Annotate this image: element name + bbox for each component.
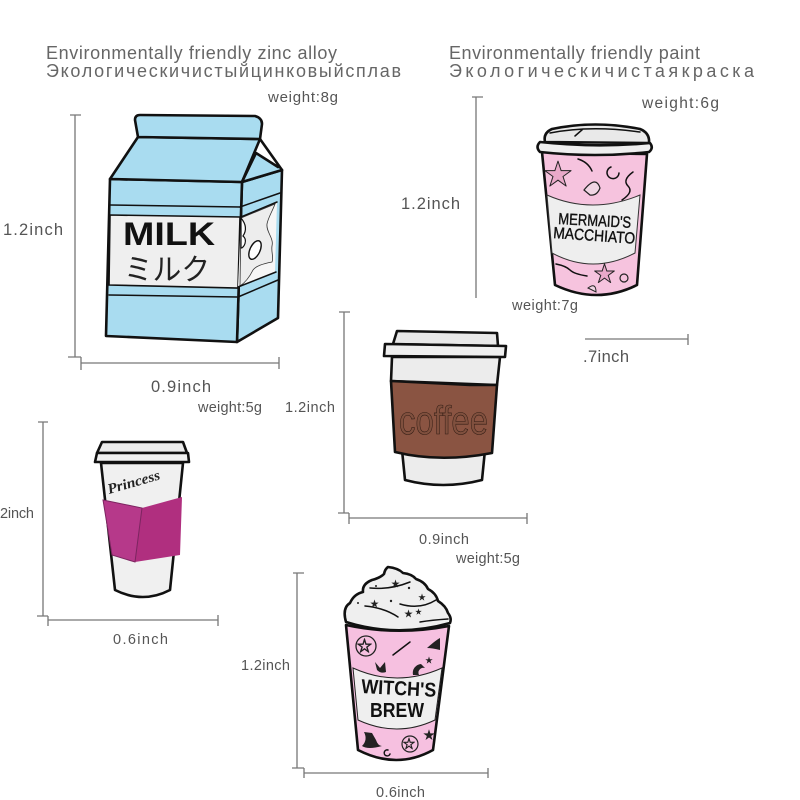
cup body — [346, 625, 449, 760]
witch icons — [356, 636, 440, 756]
dimension: mermaid cup: .7inch — [583, 348, 629, 366]
witch icons: ☆ — [403, 737, 415, 751]
pin: witch's brew cup: BREW — [370, 700, 424, 722]
carton roof fold — [242, 139, 282, 182]
dimension: milk carton: 1.2inch — [3, 221, 63, 239]
pin: mermaid's macchiato cup — [538, 124, 652, 295]
dimension: witch cup: 1.2inch — [241, 658, 290, 674]
magenta sleeve — [103, 497, 182, 562]
dimension: princess cup — [0, 422, 218, 648]
white front panel — [109, 215, 240, 288]
weight labels: weight:5g — [197, 400, 262, 416]
pin: milk carton — [106, 115, 282, 342]
dimension: coffee cup — [285, 312, 527, 548]
carton top tab — [135, 115, 262, 139]
katakana text: ミルク — [124, 254, 210, 287]
MILK text: MILK — [123, 216, 215, 252]
dimension: mermaid cup: 1.2inch — [401, 195, 460, 213]
pin: mermaid's macchiato cup: MACCHIATO — [553, 225, 636, 248]
white band — [353, 668, 442, 729]
cream stars: ★ — [370, 599, 379, 609]
witch icons: ★ — [423, 728, 435, 742]
cream stars — [357, 579, 426, 619]
lid — [97, 442, 187, 453]
heading: paint: Environmentally friendly paint — [449, 43, 700, 63]
carton front — [106, 179, 242, 342]
cup body — [391, 357, 500, 385]
heading: zinc alloy: Экологическичистыйцинковыйсплав — [46, 61, 401, 81]
cream stars: ★ — [418, 593, 426, 602]
whipped cream — [345, 567, 451, 630]
lid — [393, 331, 498, 346]
dimension: coffee cup: 1.2inch — [285, 400, 335, 416]
dimension: milk carton — [3, 115, 279, 396]
dimension: mermaid cup — [401, 97, 688, 366]
cup body — [542, 152, 647, 295]
witch's brew text: WITCH'S — [361, 676, 437, 702]
carton roof — [110, 137, 260, 182]
weight labels: weight:7g — [511, 298, 578, 314]
cup bottom — [402, 450, 485, 485]
sea icons: ★ — [594, 263, 615, 286]
pin: coffee cup — [384, 331, 506, 485]
carton side — [237, 170, 282, 342]
heading: paint — [449, 43, 755, 81]
mermaid's macchiato text: MERMAID'S — [558, 211, 632, 232]
lid — [545, 124, 649, 143]
white side panel — [238, 202, 277, 287]
weight labels: weight:5g — [455, 551, 520, 567]
pin: princess cup — [95, 442, 189, 597]
cream stars: ★ — [404, 609, 413, 619]
dimension: coffee cup: 0.9inch — [419, 532, 469, 548]
witch icons: ★ — [425, 656, 433, 665]
dimension: milk carton: 0.9inch — [151, 378, 211, 396]
dimension: witch cup — [241, 573, 488, 800]
cream stars: ★ — [415, 608, 422, 616]
sea icons — [544, 159, 633, 292]
sea icons: ★ — [544, 159, 572, 190]
princess text: Princess — [106, 467, 162, 498]
witch icons: ☆ — [357, 638, 372, 655]
brown sleeve — [391, 381, 497, 458]
weight labels: weight:8g — [267, 89, 338, 106]
pin: witch's brew cup — [345, 567, 451, 760]
dimension: princess cup: 0.6inch — [113, 632, 168, 648]
heading: paint: Экологическичистаякраска — [449, 61, 755, 81]
white band — [547, 195, 640, 264]
weight labels — [197, 89, 719, 567]
weight labels: weight:6g — [641, 95, 719, 112]
coffee text: coffee — [399, 399, 488, 443]
dimension: princess cup: 2inch — [0, 506, 34, 522]
cream stars: ★ — [391, 579, 400, 589]
heading: zinc alloy: Environmentally friendly zinc alloy — [46, 43, 337, 63]
cup body — [101, 463, 183, 597]
heading: zinc alloy — [46, 43, 401, 81]
